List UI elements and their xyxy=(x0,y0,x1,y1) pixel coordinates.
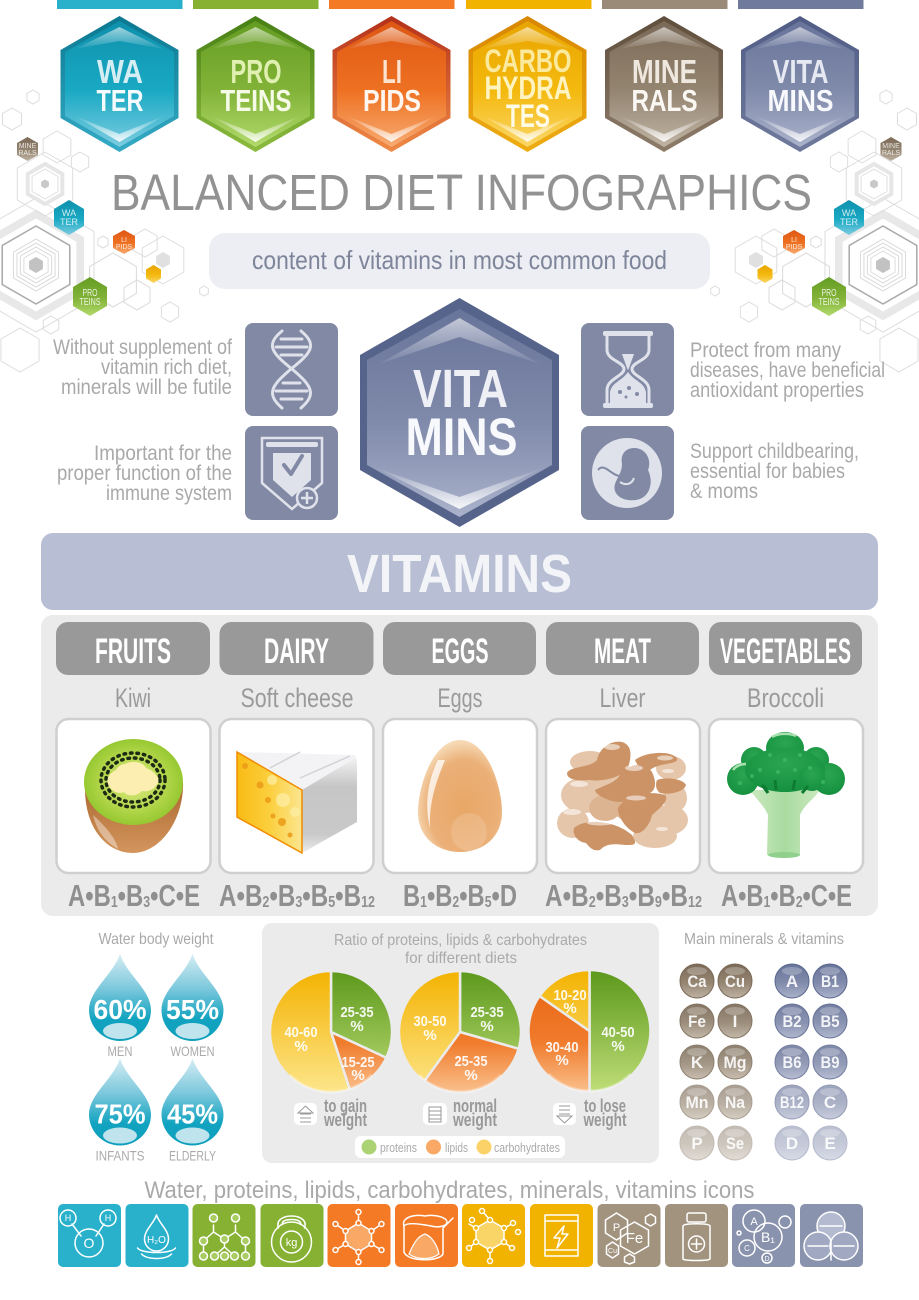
card: broccoli xyxy=(709,719,863,873)
pie: to lose weight: % xyxy=(555,1052,569,1069)
food names: Liver xyxy=(600,683,646,713)
small hex labels left: MINE xyxy=(19,143,37,150)
text: protect from diseases xyxy=(690,339,885,402)
small hex labels left: TEINS xyxy=(80,297,101,308)
vitamins: kiwi: •C•E xyxy=(150,878,200,913)
icon tile: water molecule xyxy=(58,1204,121,1267)
small hex labels left: TER xyxy=(60,217,79,227)
hexagon: water: WA xyxy=(97,53,143,90)
vitamins: cheese: •B xyxy=(302,878,328,913)
water drop: elderly: ELDERLY xyxy=(169,1148,216,1164)
pie: to gain weight: % xyxy=(294,1038,308,1055)
hexagon: proteins: PRO xyxy=(230,53,282,90)
hexagon: vitamins: VITA xyxy=(772,53,828,90)
icon tile: minerals: Cu xyxy=(608,1248,617,1255)
vitamins: eggs: •B xyxy=(459,878,485,913)
text: without supplement xyxy=(53,336,232,399)
minerals balls: I xyxy=(733,1012,737,1031)
vitamins: eggs: 2 xyxy=(452,894,459,911)
vitamins: cheese: 12 xyxy=(361,894,375,911)
minerals balls: Ca xyxy=(688,972,707,991)
card: kiwi xyxy=(56,719,210,873)
pie: to gain weight: 15-25 xyxy=(342,1054,374,1071)
icon: embryo xyxy=(581,426,674,520)
minerals balls: Mn xyxy=(686,1093,708,1112)
label: to lose weight xyxy=(553,1096,627,1130)
text: without supplement: Without supplement of xyxy=(53,336,232,359)
hexagon: minerals xyxy=(605,16,723,152)
pie: to gain weight: 40-60 xyxy=(284,1024,318,1041)
pie: normal weight: 25-35 xyxy=(470,1004,504,1021)
icon tile: water molecule: O xyxy=(84,1235,95,1251)
text: without supplement: vitamin rich diet, xyxy=(101,356,232,379)
vitamins: cheese: •B xyxy=(335,878,361,913)
hexagon: proteins xyxy=(196,16,314,152)
small hex labels left: WA xyxy=(62,208,76,218)
category: fruits xyxy=(56,622,210,675)
vitamins: liver: 3 xyxy=(622,894,629,911)
vitamins: cheese: 2 xyxy=(262,894,269,911)
icon tile: supplement bottle xyxy=(665,1204,728,1267)
pie: to lose weight xyxy=(528,970,650,1092)
category: eggs: EGGS xyxy=(432,632,488,671)
pie: to gain weight: % xyxy=(351,1067,365,1084)
minerals balls: Na xyxy=(725,1093,745,1112)
vitamin balls: B9 xyxy=(820,1053,840,1072)
icon: shield xyxy=(245,426,338,520)
icon tile: minerals xyxy=(598,1204,660,1267)
vitamins: liver: •B xyxy=(596,878,622,913)
category: meat xyxy=(546,622,699,675)
water drop: men: MEN xyxy=(108,1043,132,1059)
panel: food sources xyxy=(41,615,878,916)
vitamins banner xyxy=(41,533,878,610)
heading: icons row: Water, proteins, lipids, carbohydrates, minerals, vitamins icons xyxy=(144,1177,754,1204)
panel heading: for different diets xyxy=(405,950,517,967)
vitamins: eggs: B xyxy=(403,878,425,913)
vitamin balls: D xyxy=(786,1134,798,1153)
card: liver xyxy=(546,719,700,873)
vitamins: eggs: •B xyxy=(427,878,452,913)
hexagon: water: TER xyxy=(96,83,144,118)
background hexagon pattern right xyxy=(711,90,919,372)
text: childbearing: & moms xyxy=(690,480,758,503)
small hex labels right: PRO xyxy=(822,288,837,299)
panel heading xyxy=(334,932,587,967)
small hex labels left xyxy=(17,137,161,316)
vitamins banner: VITAMINS xyxy=(347,544,572,604)
small hex labels right xyxy=(758,137,902,316)
top colour bars xyxy=(57,0,864,9)
food names: Broccoli xyxy=(747,683,824,713)
pie: normal weight: % xyxy=(423,1027,437,1044)
pie: normal weight: % xyxy=(480,1018,494,1035)
vitamin balls: E xyxy=(824,1134,836,1153)
icon tile: vitamin bubbles: B₁ xyxy=(761,1229,775,1245)
pie: to gain weight: % xyxy=(350,1018,364,1035)
vitamins: eggs: •D xyxy=(492,878,517,913)
icon tile: carbohydrate molecule xyxy=(462,1204,525,1267)
icon: DNA xyxy=(245,323,338,416)
label: to gain weight: weight xyxy=(323,1110,367,1130)
minerals balls: Cu xyxy=(725,972,745,991)
text: without supplement: minerals will be futile xyxy=(61,376,232,399)
label: to lose weight: to lose xyxy=(584,1096,626,1116)
pie: normal weight: % xyxy=(464,1067,478,1084)
water drop: elderly xyxy=(162,1058,224,1164)
background hexagon pattern left xyxy=(0,90,208,372)
text: immune system: immune system xyxy=(106,482,232,505)
hexagon: carbohydrates: TES xyxy=(506,98,550,134)
icon tile: vitamin bubbles: C xyxy=(744,1244,750,1253)
small hex labels right: WA xyxy=(842,208,856,218)
panel: diet ratio xyxy=(262,923,659,1163)
title: BALANCED DIET INFOGRAPHICS xyxy=(111,164,812,221)
icon tile: kettlebell: kg xyxy=(286,1237,297,1249)
small hex labels left: PIDS xyxy=(116,244,132,251)
vitamins: broccoli: 1 xyxy=(764,894,770,911)
hexagon: lipids: PIDS xyxy=(363,83,421,118)
vitamins: liver: 2 xyxy=(589,894,596,911)
category: meat: MEAT xyxy=(594,632,651,671)
vitamins: liver: 9 xyxy=(655,894,662,911)
label: normal weight: normal xyxy=(453,1096,497,1116)
icon tile: protein network xyxy=(192,1204,256,1267)
pie: to gain weight: 25-35 xyxy=(340,1004,374,1021)
small hex labels right: PIDS xyxy=(786,244,802,251)
small hex labels right: TEINS xyxy=(818,297,840,308)
text: immune system: proper function of the xyxy=(57,462,232,485)
vitamins: cheese: •B xyxy=(269,878,295,913)
text: childbearing: Support childbearing, xyxy=(690,440,859,463)
food names: Kiwi xyxy=(115,683,151,713)
label: to gain weight xyxy=(294,1096,367,1130)
icon tile: lipid molecule xyxy=(328,1204,390,1267)
small hex labels right: RALS xyxy=(882,150,900,157)
food names: Eggs xyxy=(438,683,482,713)
vitamins: liver: •B xyxy=(629,878,655,913)
pie: to lose weight: % xyxy=(611,1038,625,1055)
icon tile: water drop: H₂O xyxy=(147,1235,166,1246)
central hexagon: vitamins xyxy=(360,298,559,527)
small hex labels left: RALS xyxy=(18,150,37,157)
hexagon: lipids: LI xyxy=(382,53,402,90)
hexagon: vitamins: MINS xyxy=(768,83,834,118)
water drop: men xyxy=(89,954,151,1059)
vitamins: broccoli: •C•E xyxy=(803,878,852,913)
vitamins: broccoli: 2 xyxy=(796,894,803,911)
category: eggs xyxy=(383,622,536,675)
small hex labels right: LI xyxy=(791,237,797,244)
minerals balls: K xyxy=(691,1053,704,1072)
water drop: men: 60% xyxy=(94,994,147,1025)
food names: Soft cheese xyxy=(240,683,354,713)
vitamins: cheese: 5 xyxy=(328,894,335,911)
food names xyxy=(115,683,824,713)
vitamins: broccoli: A•B xyxy=(721,878,777,913)
card: soft cheese xyxy=(220,719,374,873)
pie: to lose weight: 10-20 xyxy=(554,987,586,1004)
card: egg xyxy=(383,719,537,873)
minerals balls: P xyxy=(691,1134,703,1153)
water drop: women xyxy=(162,954,224,1059)
icon tile: pills xyxy=(800,1204,863,1267)
pie: normal weight: 25-35 xyxy=(454,1053,488,1070)
vitamin balls: B6 xyxy=(782,1053,802,1072)
central hexagon: vitamins: VITA xyxy=(413,359,508,419)
legend xyxy=(355,1136,565,1158)
pie: normal weight: 30-50 xyxy=(414,1013,446,1030)
pie: normal weight xyxy=(399,971,521,1093)
icon tile: minerals: P xyxy=(613,1222,620,1234)
minerals balls: Mg xyxy=(724,1053,746,1072)
pie: to gain weight xyxy=(270,971,392,1093)
vitamins: kiwi: A•B xyxy=(68,878,124,913)
label: to lose weight: weight xyxy=(583,1110,627,1130)
minerals balls: Fe xyxy=(688,1012,706,1031)
icon tile: minerals: Fe xyxy=(626,1230,643,1247)
hexagon: carbohydrates xyxy=(468,16,586,152)
panel heading: Ratio of proteins, lipids & carbohydrates xyxy=(334,932,587,949)
icon tile: water molecule: H xyxy=(105,1213,111,1223)
text: immune system: Important for the xyxy=(94,442,232,465)
label: normal weight: weight xyxy=(452,1110,497,1130)
heading: water body weight: Water body weight xyxy=(98,931,214,948)
vitamin balls: B1 xyxy=(821,972,839,991)
icon tile: water molecule: H xyxy=(65,1213,71,1223)
category: dairy xyxy=(220,622,374,675)
pie: to lose weight: % xyxy=(563,1000,577,1017)
water drop: women: 55% xyxy=(166,994,219,1025)
legend: carbohydrates xyxy=(494,1140,560,1155)
vitamins: kiwi: 1 xyxy=(111,894,118,911)
vitamins: broccoli: •B xyxy=(770,878,796,913)
vitamins: cheese: 3 xyxy=(295,894,302,911)
hexagon: minerals: MINE xyxy=(632,53,697,90)
icon tile: vitamin bubbles: D xyxy=(764,1256,770,1263)
icon tile: kettlebell xyxy=(260,1204,324,1267)
vitamins: kiwi: •B xyxy=(118,878,143,913)
text: childbearing xyxy=(690,440,859,503)
icon tile: water drop xyxy=(126,1204,188,1267)
text: childbearing: essential for babies xyxy=(690,460,845,483)
hexagon: carbohydrates: HYDRA xyxy=(484,70,572,106)
vitamin balls: A xyxy=(786,972,798,991)
label: to gain weight: to gain xyxy=(324,1096,367,1116)
icon: hourglass xyxy=(581,323,674,416)
legend: lipids xyxy=(445,1140,468,1155)
hexagon: carbohydrates: CARBO xyxy=(484,43,572,79)
hexagon: minerals: RALS xyxy=(632,83,698,118)
vitamin balls: C xyxy=(824,1093,836,1112)
label: normal weight xyxy=(423,1096,497,1130)
icon tile: fat roll xyxy=(395,1204,458,1267)
small hex labels right: MINE xyxy=(882,143,900,150)
water drop: infants: 75% xyxy=(94,1098,146,1130)
central hexagon: vitamins: MINS xyxy=(406,408,518,467)
text: immune system xyxy=(57,442,232,505)
vitamins: eggs: 5 xyxy=(485,894,492,911)
vitamins: liver: •B xyxy=(662,878,688,913)
icon tile: energy bar xyxy=(530,1204,593,1267)
category: dairy: DAIRY xyxy=(264,632,329,671)
vitamin balls: B2 xyxy=(782,1012,802,1031)
water drop: infants: INFANTS xyxy=(96,1148,144,1164)
hexagon: lipids xyxy=(332,16,450,152)
text: protect from diseases: Protect from many xyxy=(690,339,841,362)
icon tile: vitamin bubbles: A xyxy=(750,1216,758,1228)
vitamin balls: B12 xyxy=(780,1093,804,1112)
vitamins: eggs: 1 xyxy=(420,894,427,911)
subtitle pill: content of vitamins in most common food xyxy=(252,245,667,275)
minerals balls xyxy=(680,964,752,1160)
minerals balls: Se xyxy=(726,1134,744,1153)
text: protect from diseases: diseases, have beneficial xyxy=(690,359,885,382)
small hex labels right: TER xyxy=(840,217,859,227)
water drop: women: WOMEN xyxy=(170,1043,214,1059)
water drop: elderly: 45% xyxy=(167,1098,218,1130)
small hex labels left: LI xyxy=(121,237,127,244)
hexagon: proteins: TEINS xyxy=(220,83,292,118)
hexagon: water xyxy=(60,16,178,152)
icon tile: vitamin bubbles xyxy=(732,1204,795,1267)
category: vegetables xyxy=(709,622,862,675)
category: fruits: FRUITS xyxy=(95,632,171,671)
vitamins: cheese: A•B xyxy=(219,878,275,913)
legend: proteins xyxy=(380,1140,417,1155)
heading: main minerals and vitamins: Main minerals & vitamins xyxy=(684,931,844,948)
pie: to lose weight: 30-40 xyxy=(546,1039,578,1056)
small hex labels left: PRO xyxy=(82,288,98,299)
vitamins: liver: 12 xyxy=(688,894,702,911)
water drop: infants xyxy=(89,1058,151,1164)
hexagon: vitamins xyxy=(741,16,859,152)
text: protect from diseases: antioxidant properties xyxy=(690,379,864,402)
vitamins: liver: A•B xyxy=(545,878,601,913)
subtitle pill xyxy=(209,233,710,289)
vitamins: kiwi: 3 xyxy=(143,894,150,911)
pie: to lose weight: 40-50 xyxy=(602,1024,634,1041)
vitamin balls xyxy=(775,964,847,1160)
vitamin balls: B5 xyxy=(820,1012,840,1031)
